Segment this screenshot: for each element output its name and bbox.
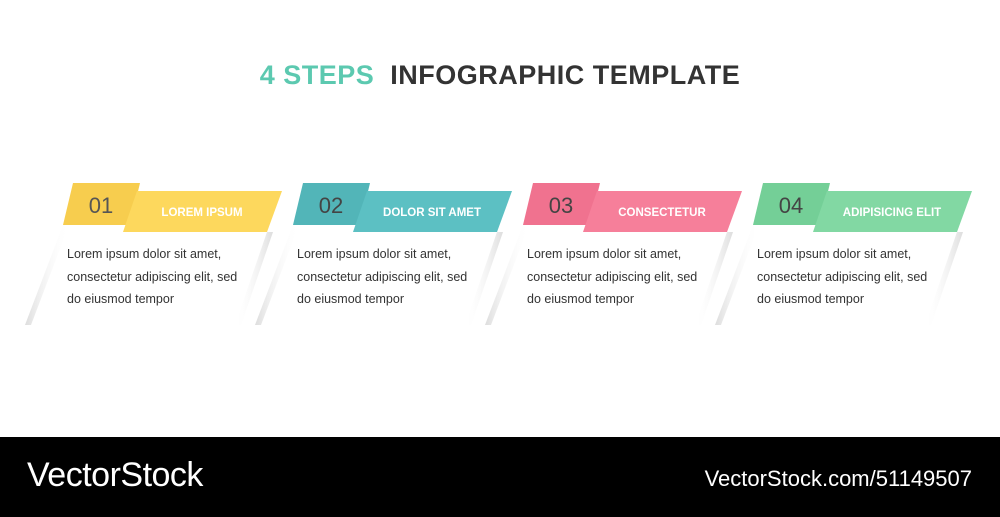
text 2: Lorem ipsum dolor sit amet, bbox=[297, 247, 451, 261]
text 1: Lorem ipsum dolor sit amet, bbox=[67, 247, 221, 261]
text 4: Lorem ipsum dolor sit amet, bbox=[757, 247, 911, 261]
text 4 bbox=[757, 247, 927, 306]
text 4: consectetur adipiscing elit, sed bbox=[757, 270, 927, 284]
text 2: consectetur adipiscing elit, sed bbox=[297, 270, 467, 284]
footer: VectorStock.com/51149507 bbox=[705, 466, 972, 491]
step 1 bbox=[25, 183, 282, 325]
step 3: 03 bbox=[549, 193, 573, 218]
step 4: ADIPISICING ELIT bbox=[843, 207, 941, 219]
footer: VectorStock bbox=[27, 456, 203, 494]
step 4 bbox=[715, 183, 972, 325]
text 3: do eiusmod tempor bbox=[527, 292, 634, 306]
step 3: CONSECTETUR bbox=[618, 207, 706, 219]
text 2 bbox=[297, 247, 467, 306]
text 3: Lorem ipsum dolor sit amet, bbox=[527, 247, 681, 261]
text 1 bbox=[67, 247, 237, 306]
text 1: do eiusmod tempor bbox=[67, 292, 174, 306]
footer bbox=[0, 437, 1000, 517]
step 1: 01 bbox=[89, 193, 113, 218]
step 4: 04 bbox=[779, 193, 803, 218]
text 1: consectetur adipiscing elit, sed bbox=[67, 270, 237, 284]
step 2 bbox=[255, 183, 512, 325]
text 2: do eiusmod tempor bbox=[297, 292, 404, 306]
step 3 bbox=[485, 183, 742, 325]
step 1: LOREM IPSUM bbox=[161, 207, 243, 219]
text 3: consectetur adipiscing elit, sed bbox=[527, 270, 697, 284]
step 2: DOLOR SIT AMET bbox=[383, 207, 481, 219]
title: 4 STEPS INFOGRAPHIC TEMPLATE bbox=[260, 60, 740, 90]
text 3 bbox=[527, 247, 697, 306]
step 2: 02 bbox=[319, 193, 343, 218]
text 4: do eiusmod tempor bbox=[757, 292, 864, 306]
